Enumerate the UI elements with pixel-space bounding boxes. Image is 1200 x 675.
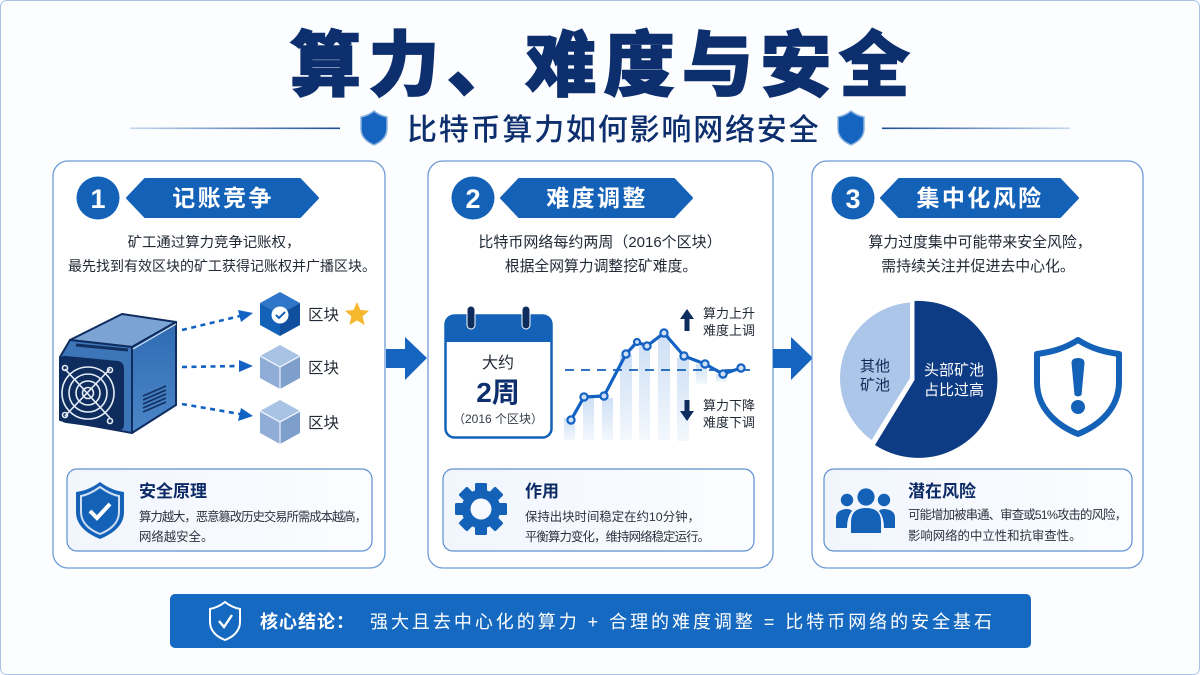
block: winning — [260, 292, 369, 336]
banner heading — [501, 179, 692, 217]
info box: 安全原理 — [67, 469, 372, 551]
pie chart: pool share: 矿池 — [860, 377, 890, 394]
icon: people — [836, 488, 895, 533]
arrow: panel 2 to 3 — [773, 337, 813, 380]
banner heading: 集中化风险 — [916, 185, 1044, 211]
pie chart: pool share: 头部矿池 — [924, 362, 984, 379]
legend: hashrate down — [680, 398, 755, 430]
icon: calendar — [445, 306, 552, 438]
info box: 潜在风险: 可能增加被串通、审查或51%攻击的风险， — [908, 507, 1127, 522]
block: third — [260, 400, 339, 444]
info box: 安全原理: 算力越大，恶意篡改历史交易所需成本越高， — [139, 509, 367, 524]
icon: mining machine — [60, 314, 176, 433]
info box: 作用 — [443, 469, 754, 551]
banner heading — [127, 179, 318, 217]
panel: 难度调整 — [428, 161, 773, 568]
description — [868, 233, 1092, 275]
step number 3: 3 — [845, 184, 861, 214]
legend: hashrate up: 难度上调 — [703, 323, 755, 338]
banner heading — [881, 179, 1078, 217]
block: second — [260, 345, 339, 389]
step number 1 — [76, 176, 120, 220]
conclusion banner: 强大且去中心化的算力 + 合理的难度调整 = 比特币网络的安全基石 — [370, 612, 992, 632]
conclusion banner: 核心结论： — [260, 611, 355, 632]
icon: calendar: （2016 个区块） — [453, 412, 543, 426]
icon: star — [345, 302, 369, 325]
subtitle row — [130, 111, 1070, 147]
step number 2 — [452, 176, 494, 220]
icon: calendar: 2周 — [476, 377, 520, 408]
panel: 记账竞争 — [53, 161, 385, 568]
info box: 安全原理: 网络越安全。 — [139, 529, 213, 544]
block: winning: 区块 — [308, 306, 339, 324]
info box: 作用: 作用 — [525, 482, 559, 501]
icon: calendar: 大约 — [482, 354, 514, 372]
info box: 安全原理: 安全原理 — [139, 481, 207, 501]
legend: hashrate up: 算力上升 — [703, 306, 755, 321]
description: 矿工通过算力竞争记账权， — [128, 233, 300, 251]
block: third: 区块 — [308, 414, 339, 432]
description: 算力过度集中可能带来安全风险， — [868, 233, 1092, 251]
info box: 潜在风险: 影响网络的中立性和抗审查性。 — [908, 528, 1081, 543]
legend: hashrate up — [680, 306, 755, 338]
block: second: 区块 — [308, 359, 339, 377]
pie chart: pool share: 占比过高 — [924, 382, 984, 399]
icon: gear — [455, 483, 507, 535]
description: 最先找到有效区块的矿工获得记账权并广播区块。 — [68, 258, 376, 274]
description — [68, 233, 376, 274]
banner heading: 难度调整 — [546, 185, 648, 211]
icon: conclusion shield — [210, 602, 240, 640]
info box: 潜在风险: 潜在风险 — [908, 481, 976, 501]
arrows: machine to blocks — [182, 310, 253, 421]
description: 需持续关注并促进去中心化。 — [881, 258, 1075, 275]
info box: 作用: 平衡算力变化，维持网络稳定运行。 — [525, 529, 710, 544]
pie chart: pool share — [840, 301, 997, 458]
line chart: hashrate — [564, 329, 755, 441]
pie chart: pool share: 其他 — [860, 358, 890, 375]
legend: hashrate down: 算力下降 — [703, 398, 755, 413]
icon: left shield — [361, 111, 387, 145]
banner heading: 记账竞争 — [172, 185, 274, 211]
description — [478, 234, 722, 275]
conclusion banner — [170, 594, 1031, 648]
legend: hashrate down: 难度下调 — [703, 415, 755, 430]
arrow: panel 1 to 2 — [386, 337, 427, 380]
step number 1: 1 — [90, 184, 106, 214]
info box: 潜在风险 — [824, 469, 1132, 551]
panel: 集中化风险 — [812, 161, 1143, 568]
icon: right shield — [838, 111, 864, 145]
description: 比特币网络每约两周（2016个区块） — [478, 234, 722, 251]
icon: warning shield — [1037, 340, 1119, 434]
subtitle text: 比特币算力如何影响网络安全 — [407, 114, 820, 147]
step number 2: 2 — [465, 184, 481, 214]
description: 根据全网算力调整挖矿难度。 — [505, 257, 697, 275]
step number 3 — [832, 176, 874, 220]
icon: check shield — [76, 482, 124, 539]
title: 算力、难度与安全 — [290, 27, 917, 106]
info box: 作用: 保持出块时间稳定在约10分钟， — [525, 509, 700, 524]
